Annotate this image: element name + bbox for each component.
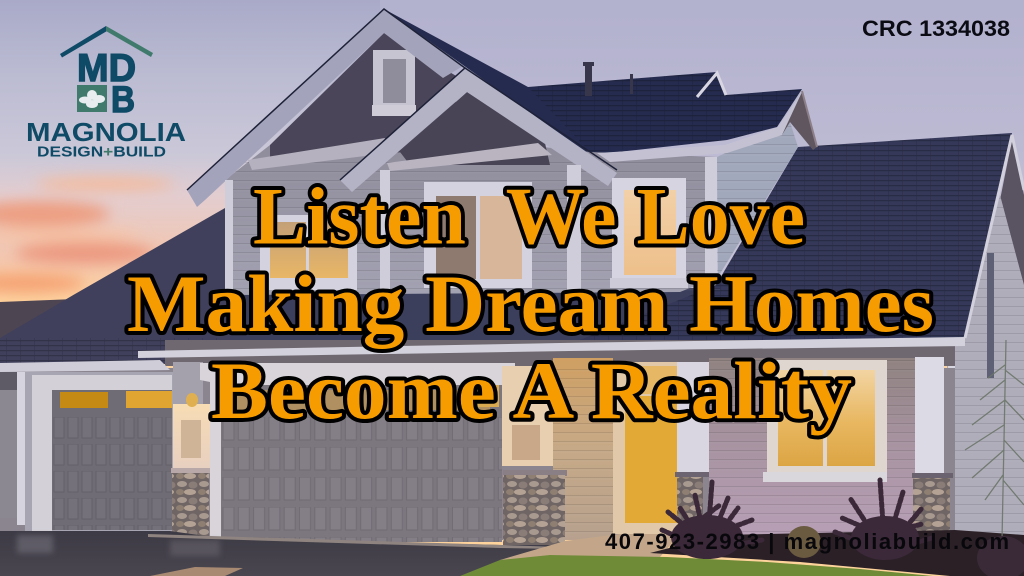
right bay siding bbox=[717, 122, 798, 277]
main eave bbox=[138, 337, 965, 358]
distant roof bbox=[0, 299, 75, 345]
left posts and frame bbox=[17, 372, 173, 532]
wall lamp bbox=[186, 393, 198, 407]
tan siding bbox=[553, 358, 613, 540]
lower base wall bbox=[0, 368, 955, 540]
window upper middle bbox=[424, 182, 532, 288]
sky right of house bbox=[380, 0, 1024, 330]
corner boards bbox=[225, 157, 717, 295]
right gable trim bbox=[965, 135, 1024, 338]
walkway bbox=[500, 534, 680, 560]
small dormer trim bbox=[697, 73, 726, 97]
logo tagline: DESIGN +BUILD bbox=[37, 144, 166, 160]
roof vents bbox=[583, 62, 633, 96]
headline line 1: Listen We Love bbox=[253, 170, 805, 262]
lawn bbox=[460, 555, 933, 576]
far left wall bbox=[0, 390, 17, 518]
roof band bbox=[230, 288, 720, 352]
mulch bed bbox=[650, 530, 1024, 576]
upper roof bbox=[384, 9, 802, 155]
right end wall siding bbox=[947, 195, 1024, 540]
soffit band bbox=[165, 340, 955, 366]
right gable interior bbox=[1000, 140, 1024, 300]
gable trim front bbox=[340, 68, 617, 192]
dark gable interior bbox=[270, 33, 463, 160]
pillar left bbox=[171, 362, 210, 536]
driveway bbox=[0, 531, 640, 576]
porch column left bbox=[675, 362, 715, 522]
licence number: CRC 1334038 bbox=[862, 16, 1010, 41]
driveway reflections bbox=[17, 534, 560, 576]
sunset clouds bbox=[0, 177, 175, 293]
porch column right bbox=[912, 357, 953, 535]
mauve siding bbox=[709, 358, 915, 535]
logo B: B bbox=[111, 79, 135, 120]
main garage frame bbox=[200, 363, 515, 537]
logo bbox=[26, 26, 186, 160]
logo flower tile bbox=[77, 85, 107, 112]
pillar centre bbox=[502, 366, 567, 545]
right side window slit bbox=[987, 253, 994, 378]
front window bbox=[763, 360, 887, 482]
attic vent bbox=[372, 50, 416, 116]
lower left roof bbox=[0, 208, 250, 364]
gable trim left bbox=[187, 9, 463, 207]
headline bbox=[127, 170, 934, 436]
logo roof bbox=[60, 26, 153, 58]
window upper right bbox=[610, 178, 688, 288]
small shrub bbox=[787, 526, 821, 558]
evergreen tree bbox=[965, 340, 1024, 540]
left garage door bbox=[52, 390, 172, 530]
right bay gable bbox=[782, 92, 817, 150]
left eave bbox=[0, 360, 170, 372]
frieze boards bbox=[248, 138, 385, 170]
front door bbox=[613, 362, 683, 534]
window upper left bbox=[260, 215, 357, 290]
shrub right bbox=[835, 480, 932, 560]
contact line: 407-923-2983 | magnoliabuild.com bbox=[605, 529, 1009, 554]
logo MD: MD bbox=[77, 47, 136, 90]
shrub left bbox=[662, 482, 762, 559]
upper eave trim bbox=[597, 92, 802, 162]
main garage door bbox=[221, 385, 502, 542]
big right roof bbox=[560, 133, 1012, 348]
logo wordmark: MAGNOLIA bbox=[26, 117, 186, 147]
shrub bottom right bbox=[977, 536, 1024, 576]
front gable interior bbox=[400, 92, 550, 165]
headline line 3: Become A Reality bbox=[211, 345, 852, 436]
headline line 2: Making Dream Homes bbox=[127, 258, 934, 349]
upper wall bbox=[225, 130, 717, 295]
